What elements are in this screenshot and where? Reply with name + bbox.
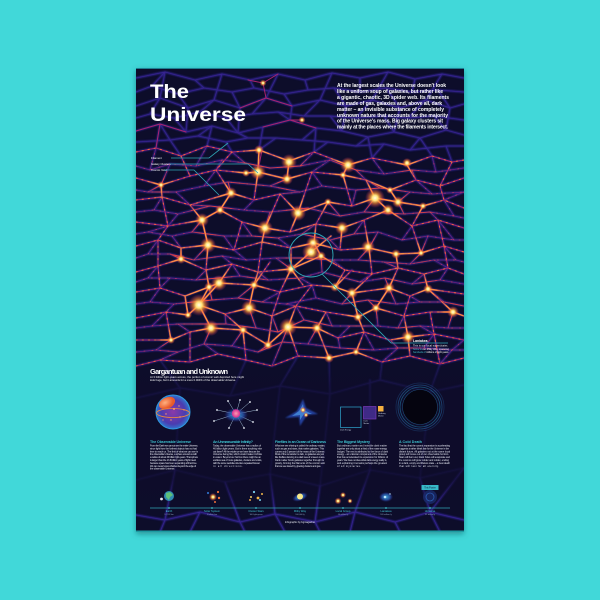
cosmic web map [136, 72, 464, 532]
illustration: dark matter star [285, 399, 318, 426]
Laniakea callout: hundreds of millions of light-years. [413, 351, 449, 354]
legend: web features: Cosmic Void [151, 168, 167, 172]
tag: you are looking here [422, 485, 438, 490]
column 2: An Unmeasurable Infinity?: in extent. Beyond our horizon there might be an [213, 456, 262, 459]
column 2: An Unmeasurable Infinity?: endless sea of more galaxies, clusters and voids, [213, 459, 262, 462]
column 5: A Cold Death: The fact that the cosmic expansion is accelerating [399, 444, 451, 448]
heading: Gargantuan and Unknown: At 3 billion light-years across, the portion of cosmic web depicted here might [150, 375, 244, 379]
title: Universe [150, 105, 246, 126]
column 2: An Unmeasurable Infinity?: with the same web-like structure repeated forever [213, 462, 260, 465]
column 4: The Biggest Mystery: that has accelerated its expansion for billions of [337, 456, 388, 459]
column 4: The Biggest Mystery: together are only about a third of the mass-energy [337, 447, 388, 450]
poster top and bottom edge [136, 68, 464, 532]
scale labels: Cluster Stars [248, 509, 264, 513]
scale labels: Laniakea [381, 509, 392, 513]
intro paragraph: At the largest scales the Universe doesn't look [337, 83, 446, 89]
upper web highlights [136, 74, 316, 171]
Laniakea callout [289, 233, 450, 354]
column 3: Fireflies in an Ocean of Darkness: What we see shining is called the ordinary matter, [275, 444, 325, 448]
heading: Gargantuan and Unknown: Gargantuan and Unknown [150, 367, 228, 376]
scale timeline: 12,742 km [164, 514, 174, 516]
column 2: An Unmeasurable Infinity?: in all directions. [213, 465, 243, 468]
illustration: matter share squares: Dark Energy [340, 430, 351, 432]
intro paragraph: matter – an invisible substance of completely [337, 107, 444, 113]
column 5: A Cold Death [399, 440, 451, 468]
intro paragraph: mainly at the places where the filaments intersect. [337, 124, 449, 130]
scale timeline: 520 million ly [380, 514, 392, 516]
intro paragraph: unknown nature that accounts for the majority [337, 113, 448, 119]
scale labels: Local Group [336, 509, 351, 513]
column 5: A Cold Death: that will last for all eternity. [399, 465, 439, 468]
galaxy cluster hotspots [157, 80, 459, 363]
column 4: The Biggest Mystery: The Biggest Mystery [337, 440, 370, 444]
column 5: A Cold Death: Stars will burn out, black holes will evaporate and [399, 456, 451, 459]
column 3: Fireflies in an Ocean of Darkness: comes only 5 percent of the mass of the Universe. [275, 450, 325, 453]
column 2: An Unmeasurable Infinity?: Universe being flat, which would make it infinite [213, 453, 263, 456]
column 1: The Observable Universe: the observable Universe. [150, 468, 175, 471]
column 1: The Observable Universe: is larger than the 13.8 billion years of light travel [150, 459, 196, 462]
column 5: A Cold Death: distant future. All galaxies not at the same local [399, 450, 450, 453]
scale timeline: 93 billion ly [425, 514, 435, 516]
column 5: A Cold Death: group will move out of our observable horizon. [399, 453, 449, 456]
illustration: matter share squares: Ordinary [378, 413, 386, 415]
column 5: A Cold Death: the cosmos will grow colder and colder, ending [399, 459, 450, 462]
scale icon: Local Group [335, 492, 353, 504]
column 4: The Biggest Mystery: and explaining it remains perhaps the greatest [337, 462, 387, 465]
fade behind lower section [136, 360, 464, 510]
Laniakea callout: This is our local supercluster, [413, 344, 448, 348]
heading: Gargantuan and Unknown: look huge, but it amounts for a mere 0.004% of the observable Universe. [150, 378, 236, 382]
column 1: The Observable Universe: time to reach us. The limit of what we can see is [150, 450, 199, 453]
scale timeline [150, 485, 450, 516]
scale icon: Earth [160, 491, 174, 501]
Laniakea callout: Laniakea [413, 339, 428, 343]
column 2: An Unmeasurable Infinity?: 46 billion light-years. But is there anything else [213, 447, 263, 450]
column 2: An Unmeasurable Infinity?: out there? All the evidence we have favours the [213, 450, 261, 453]
column 1: The Observable Universe: a radius of about 46 billion light-years. That sphere [150, 456, 199, 459]
column 3: Fireflies in an Ocean of Darkness: gravity, forming the filaments of the cosmic web [275, 462, 326, 465]
illustration: matter share squares [340, 406, 386, 432]
intro paragraph: a gigantic, chaotic, 3D spider web. Its filaments [337, 95, 449, 101]
column 1: The Observable Universe: the observable Universe, a sphere around us with [150, 453, 198, 456]
poster panel [136, 68, 464, 532]
illustration: matter share squares: Dark [364, 420, 368, 422]
column 4: The Biggest Mystery: of all mysteries. [337, 465, 361, 468]
legend: web features [151, 143, 258, 195]
column 1: The Observable Universe: since light from the furthest objects has not had [150, 447, 198, 450]
scale icon: star cluster [249, 491, 263, 501]
illustration: matter share squares: Matter [378, 414, 384, 418]
scale timeline: 10 million ly [338, 514, 348, 516]
scale labels: Solar System [204, 509, 221, 513]
column 2: An Unmeasurable Infinity?: An Unmeasurable Infinity? [213, 440, 253, 444]
footer credit: Infographic by bgmagazine [285, 520, 316, 524]
illustration: observable universe sphere [156, 394, 190, 429]
column 3: Fireflies in an Ocean of Darkness [275, 440, 326, 468]
illustration: infinity with tendrils [213, 399, 258, 429]
intro paragraph: like a uniform soup of galaxies, but rather like [337, 89, 443, 95]
scale labels: Universe [425, 509, 436, 513]
scale icon: solar system [207, 491, 220, 503]
column 4: The Biggest Mystery: years. We have no idea what dark energy really is, [337, 459, 387, 462]
scale icon: Milky Way [291, 491, 309, 503]
filaments heating near clusters [136, 146, 464, 366]
column 3: Fireflies in an Ocean of Darkness: Dark matter binds galaxies together through its [275, 459, 325, 462]
column 3: Fireflies in an Ocean of Darkness: Fireflies in an Ocean of Darkness [275, 440, 326, 444]
legend: web features: Filament [151, 156, 162, 160]
title: The [150, 82, 189, 103]
column 1: The Observable Universe: because space has been expanding all that time. [150, 462, 197, 465]
tag: you are looking here: This Poster [424, 486, 436, 490]
scale labels: Earth [166, 509, 173, 513]
column 5: A Cold Death: suggests a rather bleak fate for the Universe in the [399, 447, 450, 450]
column 4: The Biggest Mystery: energy – an unknown component of the Universe [337, 453, 388, 456]
column 5: A Cold Death: A Cold Death [399, 440, 422, 444]
scale labels: Milky Way [294, 509, 307, 513]
scale icon: Laniakea [379, 492, 393, 502]
column 2: An Unmeasurable Infinity?: Today, the observable Universe has a radius of [213, 444, 261, 448]
column 1: The Observable Universe: We can never know what lies beyond the edge of [150, 465, 196, 468]
scale timeline: 100 light-years [249, 513, 263, 516]
Laniakea callout: home to our Milky Way, spanning [413, 348, 450, 351]
column 1: The Observable Universe: From the Earth we cannot see the entire Universe, [150, 444, 198, 448]
scale labels [166, 509, 436, 513]
column 4: The Biggest Mystery: budget. The rest is attributed to the force of dark [337, 450, 389, 453]
illustration: black hole [396, 383, 444, 431]
illustration: matter share squares: Matter [364, 422, 370, 425]
legend: web features: Galaxy Clusters [151, 162, 171, 166]
column 1: The Observable Universe: The Observable Universe [150, 440, 191, 444]
column 2: An Unmeasurable Infinity? [213, 440, 263, 468]
column 4: The Biggest Mystery [337, 440, 389, 468]
column 3: Fireflies in an Ocean of Darkness: Most of the remainder is dark, so galaxies are just [275, 453, 324, 456]
intro paragraph: are made of gas, galaxies and, above all, dark [337, 101, 442, 107]
intro paragraph: of the Universe's mass. Big galaxy clusters sit [337, 118, 443, 124]
scale icon: observable universe [423, 490, 437, 504]
column 1: The Observable Universe [150, 440, 199, 471]
column 3: Fireflies in an Ocean of Darkness: that we see traced by glowing clusters and gas. [275, 465, 321, 468]
scale timeline: 100,000 ly [295, 514, 305, 516]
scale timeline: 9 billion km [207, 514, 217, 516]
column 5: A Cold Death: in a dark, empty and lifeless state – a heat death [399, 462, 451, 465]
intro paragraph [337, 83, 449, 130]
title [150, 82, 246, 126]
column 4: The Biggest Mystery: But ordinary matter and invisible dark matter [337, 444, 387, 448]
heading: Gargantuan and Unknown [150, 367, 244, 382]
column 3: Fireflies in an Ocean of Darkness: like fireflies dancing in a dark sea of unseen mass. [275, 456, 325, 459]
column 3: Fireflies in an Ocean of Darkness: such as gas and stars, that makes galaxies. This [275, 447, 325, 450]
